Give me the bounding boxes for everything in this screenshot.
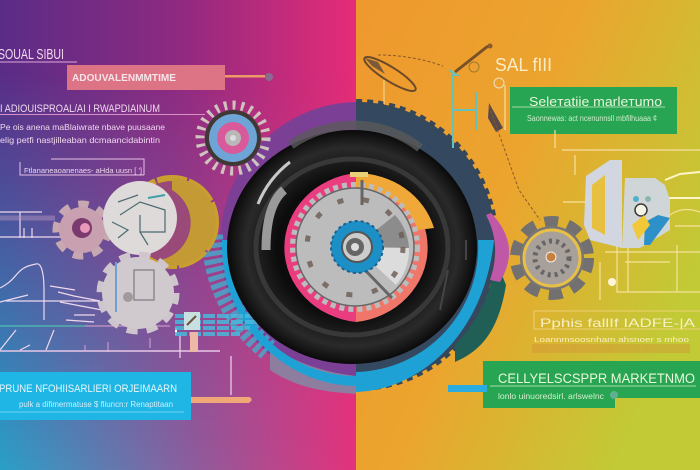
banner: green top right: Saonnewas: act ncenunnsll mbfilhuaaa ¢ bbox=[527, 114, 657, 123]
connector: orange tab bbox=[191, 397, 252, 403]
wheel: pink inner ring bbox=[284, 172, 434, 322]
banner: pink label with connector bbox=[67, 65, 273, 90]
text block: right lower: Pphis fallIf IADFE-|A bbox=[540, 316, 695, 330]
ring: tyre outer bbox=[212, 102, 506, 394]
illustration: left circuit lines bbox=[0, 212, 231, 395]
banner: green bottom right: CELLYELSCSPPR MARKETNMO bbox=[498, 371, 695, 386]
gear: gold ring behind disc bbox=[128, 178, 216, 266]
text block: left upper bbox=[0, 103, 205, 145]
illustration: cyan block behind wheel bbox=[175, 312, 262, 352]
banner: green top right: Seleтatiie marleтumo bbox=[529, 94, 662, 109]
wheel: black ring bbox=[227, 125, 477, 364]
gear: small pink left bbox=[57, 205, 107, 255]
heading: top left: SOUAL SIBUI bbox=[0, 46, 64, 63]
illustration: right circuit lines bbox=[563, 172, 700, 300]
text block: left upper: I ADIOUISPROAL/AI I RWAPDIAINUM bbox=[0, 103, 160, 115]
dot: white joint bbox=[608, 278, 616, 286]
hub: blue center bbox=[331, 221, 383, 273]
heading: top right bbox=[469, 55, 552, 88]
background: right panel gradient bbox=[356, 0, 700, 470]
gear: sketch disc bbox=[103, 181, 177, 255]
banner: green bottom right: lonlo uinuoredsirl. arlswelnc bbox=[498, 392, 604, 401]
text block: left upper: elig petfi nastjilleaban dcmaancidabintin bbox=[0, 135, 160, 145]
heading: top right: SAL fIII bbox=[495, 55, 552, 75]
text block: left upper: Pe ois anena maBlaiwrate nbave puusaane bbox=[0, 122, 165, 132]
banner: green bottom right bbox=[483, 361, 700, 408]
illustration: beetle and dashed arc bbox=[488, 85, 700, 220]
callout: outlined caption bbox=[20, 159, 144, 175]
gear: lower pale bbox=[100, 255, 176, 331]
arc: pink stripes on wheel edge bbox=[486, 213, 509, 282]
banner: cyan bottom left: pulk a difimermatuse $ fliuncn:r Renaptitaan bbox=[19, 400, 173, 409]
connector: blue bar bbox=[448, 385, 487, 392]
banner: pink label with connector: ADOUVALENMMTIME bbox=[72, 73, 176, 84]
gear: central silver bbox=[293, 180, 417, 309]
background: left panel gradient bbox=[0, 0, 357, 470]
gear: right gray bbox=[517, 223, 587, 293]
illustration: top right tools bbox=[361, 44, 492, 148]
banner: cyan bottom left bbox=[0, 372, 191, 420]
banner: green top right bbox=[510, 87, 677, 134]
text block: right lower bbox=[532, 311, 700, 353]
banner: cyan bottom left: PRUNE NFOHIISARLIERI ORJEIMAARN bbox=[0, 383, 177, 395]
gear: top small bbox=[200, 105, 266, 171]
device: right machine bbox=[584, 160, 670, 248]
callout: outlined caption: Ftlananeaoanenaes- aHda uusn [ '] bbox=[24, 166, 142, 175]
text block: right lower: Loannmsoosnham ahsnoer s mhoo bbox=[534, 335, 689, 344]
